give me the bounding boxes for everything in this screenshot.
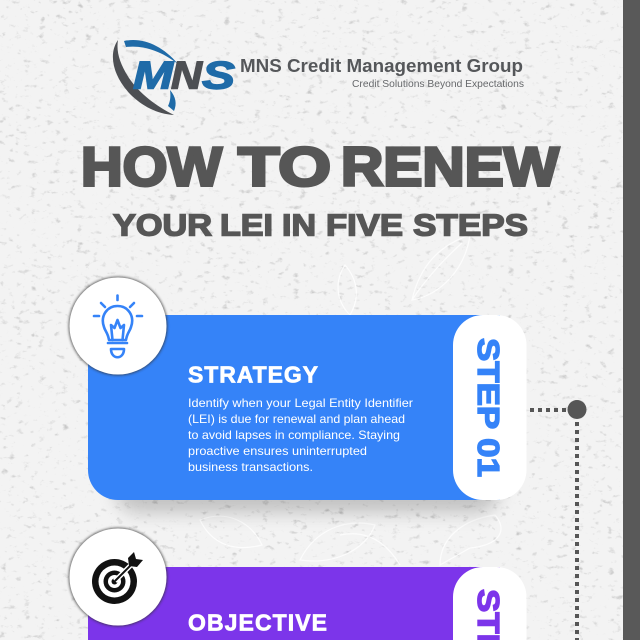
title: RENEW [341,136,559,198]
logo letters MNS: M [133,54,175,98]
body text: Identify when your Legal Entity Identifier [188,396,413,410]
tagline: Credit Solutions Beyond Expectations [352,78,524,90]
company name: MNS Credit Management Group [240,56,523,76]
circle badge [70,528,166,626]
panel: step 2 objective [68,528,526,640]
logo [113,40,524,115]
circle badge shadow [68,276,168,376]
card shadow [115,335,500,513]
title: HOW [81,136,222,198]
subtitle: IN [282,208,316,242]
logo letters MNS: S [202,54,235,98]
circle badge shadow [68,528,168,626]
heading: STRATEGY [188,362,318,388]
decorative leaf outlines [200,235,501,565]
body text: (LEI) is due for renewal and plan ahead [188,412,405,426]
body text: business transactions. [188,460,313,474]
subtitle: STEPS [413,208,528,242]
icon: light bulb [94,296,142,357]
card background [88,567,500,640]
title [81,136,559,198]
body text [188,396,413,474]
subtitle: YOUR [113,208,212,242]
card background [88,315,500,500]
step tab [453,315,526,500]
body text: proactive ensures uninterrupted [188,444,367,458]
body text: to avoid lapses in compliance. Staying [188,428,400,442]
right side dark bar [623,0,640,640]
subtitle [113,208,528,242]
subtitle: LEI [220,208,273,242]
step tab [453,567,526,640]
icon: target with arrow [92,552,143,604]
circle badge [70,278,166,374]
subtitle: FIVE [326,208,403,242]
connector: step 1 [530,400,586,640]
logo swoosh [113,40,178,115]
heading: OBJECTIVE [188,610,327,636]
logo letters MNS [133,54,235,98]
logo letters MNS: N [171,54,203,98]
title: TO [238,136,331,198]
panel: step 1 strategy [68,276,526,513]
step label: STEP 01 [471,338,506,477]
